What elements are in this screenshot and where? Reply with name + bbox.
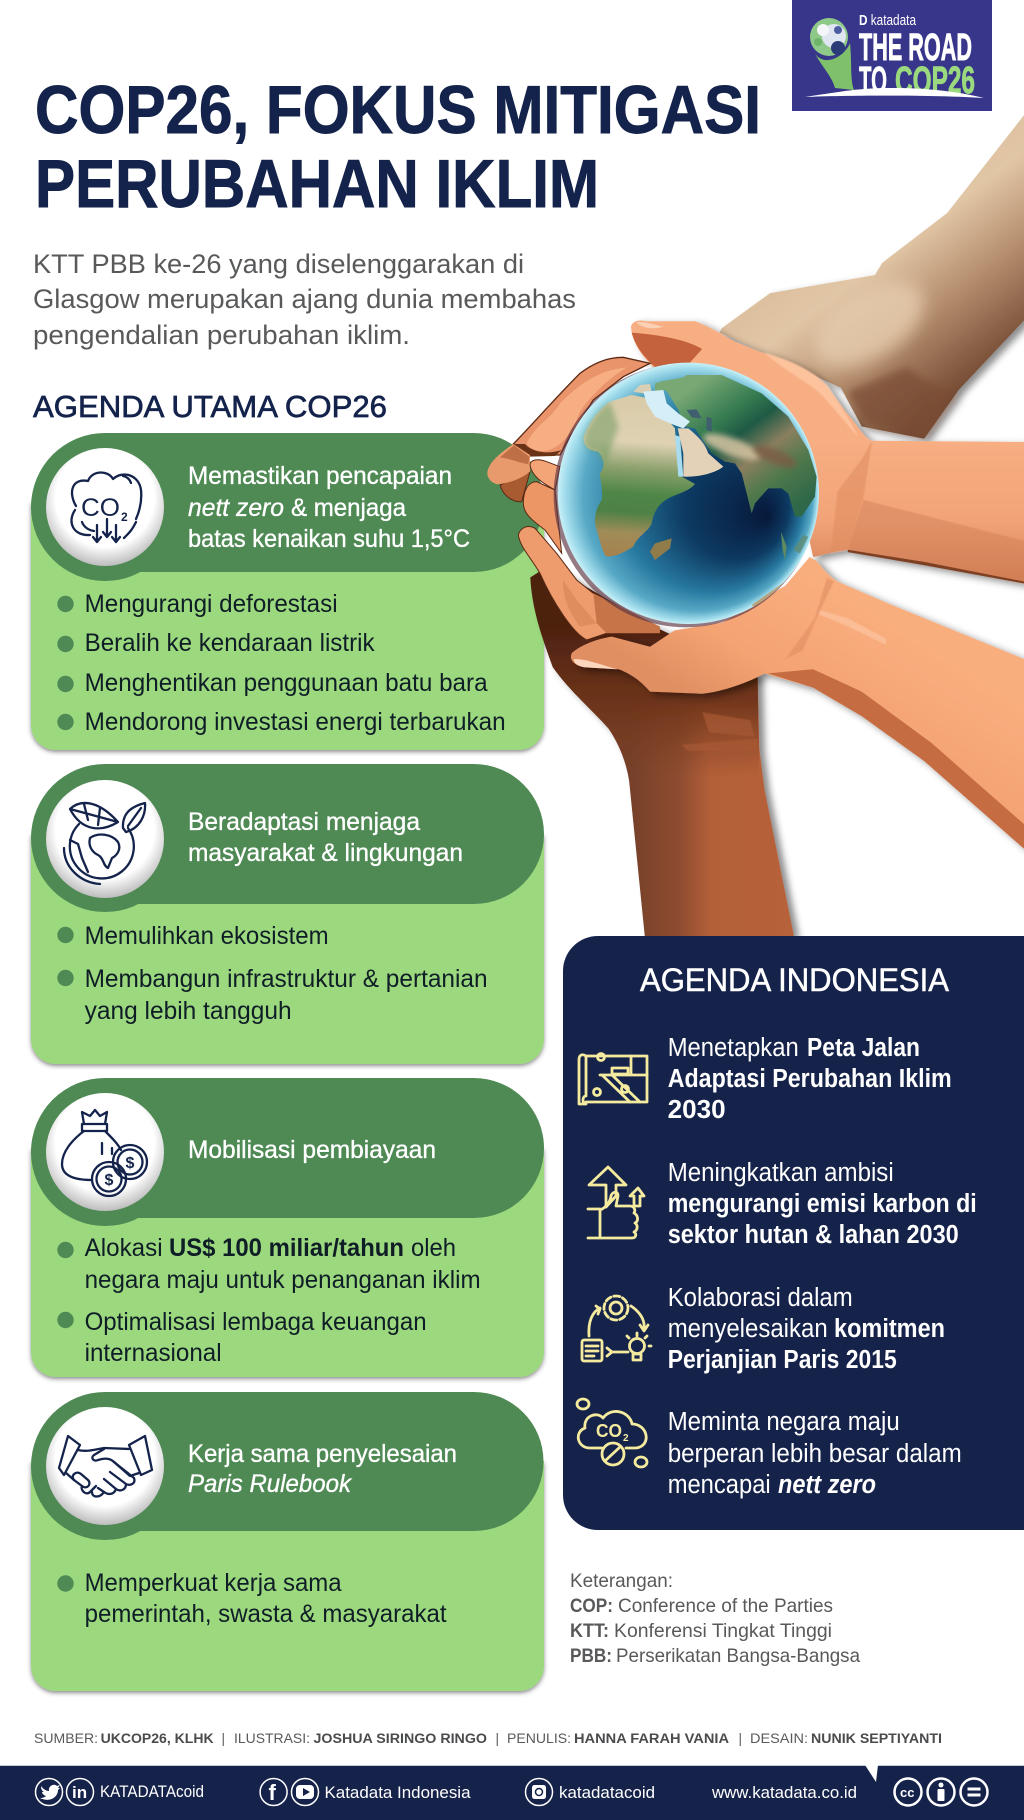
icon: youtube	[292, 1778, 318, 1806]
card 4 heading: Kerja sama penyelesaian	[188, 1440, 457, 1468]
globe	[554, 363, 819, 627]
source credits: |	[496, 1731, 499, 1746]
eurasia brown band	[751, 444, 798, 470]
finger tip	[487, 444, 530, 484]
card 2 body	[31, 834, 544, 1064]
card 1 heading: batas kenaikan suhu 1,5°C	[188, 525, 470, 553]
agenda item 2: mengurangi emisi karbon di	[668, 1190, 977, 1218]
footer notch	[865, 1765, 878, 1782]
illustration: hands holding globe	[487, 115, 1024, 936]
icon: facebook: f	[268, 1780, 276, 1805]
icon: earth and leaves	[64, 803, 145, 884]
sumatra	[781, 532, 787, 560]
card 4 heading	[188, 1440, 457, 1498]
card 2 bullets: yang lebih tangguh	[85, 997, 292, 1025]
card 4 body	[31, 1461, 544, 1691]
logo globe	[810, 18, 848, 56]
card 1 heading	[188, 462, 470, 553]
panel: card 3 finance	[31, 1078, 544, 1377]
intro text	[33, 249, 576, 350]
agenda item 3: komitmen	[834, 1315, 945, 1343]
notes: keterangan: Conference of the Parties	[618, 1595, 833, 1617]
source credits	[34, 1731, 942, 1746]
logo swoosh	[805, 88, 984, 98]
agenda item 4	[668, 1408, 962, 1499]
logo wordmark: TO	[859, 60, 887, 102]
source credits: SUMBER:	[34, 1731, 98, 1746]
lower palm	[518, 527, 660, 640]
borneo	[793, 535, 808, 553]
source credits: DESAIN:	[750, 1731, 808, 1746]
eurasia tan band	[700, 430, 761, 463]
source credits: UKCOP26, KLHK	[101, 1731, 214, 1746]
tan arm	[719, 115, 1024, 439]
card 1 bullets: Mendorong investasi energi terbarukan	[85, 708, 506, 736]
intro text: Glasgow merupakan ajang dunia membahas	[33, 284, 576, 314]
icon: creative commons: cc	[900, 1785, 914, 1800]
mediterranean	[643, 390, 690, 428]
card 2 bullets: Membangun infrastruktur & pertanian	[85, 965, 488, 993]
card 3 ring	[31, 1078, 179, 1226]
agenda item 2	[668, 1159, 977, 1249]
arabia	[678, 428, 723, 477]
card 1 bullets: Menghentikan penggunaan batu bara	[85, 669, 488, 697]
panel: agenda indonesia	[563, 936, 1024, 1530]
icon: CO2 cloud: 2	[121, 510, 128, 524]
continent: africa	[583, 395, 695, 557]
card 2 bullets	[57, 922, 488, 1025]
card 4 bullets	[57, 1569, 447, 1628]
icon: facebook	[260, 1778, 287, 1806]
card 2 heading: Beradaptasi menjaga	[188, 808, 420, 836]
agenda item 4: mencapai	[668, 1471, 771, 1499]
card 4 heading: Paris Rulebook	[188, 1470, 352, 1498]
africa west shading	[583, 402, 618, 467]
panel: card 4 paris rulebook	[31, 1392, 544, 1691]
agenda item 3: Perjanjian Paris 2015	[668, 1346, 897, 1374]
lower right arm and palm	[571, 557, 1024, 849]
card 2 ring	[31, 764, 179, 912]
card 2 header	[105, 764, 544, 904]
agenda item 3: menyelesaikan	[668, 1315, 828, 1343]
logo wordmark: D katadata	[859, 12, 917, 29]
agenda item 1: Menetapkan	[668, 1034, 799, 1062]
under finger	[500, 472, 530, 502]
footer handle: katadatacoid: katadatacoid	[559, 1783, 655, 1802]
source credits: NUNIK SEPTIYANTI	[811, 1731, 942, 1746]
card 3 body	[31, 1148, 544, 1377]
icon: map	[579, 1054, 647, 1104]
logo hand	[815, 43, 854, 90]
right arm with upper hand	[631, 320, 1024, 584]
title: PERUBAHAN IKLIM	[35, 146, 599, 222]
card 3 bullets	[57, 1234, 481, 1367]
inland seas	[687, 409, 712, 432]
footer handle: KATADATAcoid: KATADATAcoid	[100, 1782, 204, 1801]
logo wordmark	[859, 12, 975, 102]
agenda item 2: Meningkatkan ambisi	[668, 1159, 894, 1187]
card 2 heading: masyarakat & lingkungan	[188, 839, 463, 867]
card 4 ring	[31, 1392, 179, 1540]
card 3 heading: Mobilisasi pembiayaan	[188, 1136, 436, 1164]
left fingers	[487, 357, 660, 640]
globe ocean	[558, 363, 819, 624]
panel: card 2 adaptation	[31, 764, 544, 1064]
panel heading: AGENDA INDONESIA	[640, 962, 950, 998]
notes: keterangan: Konferensi Tingkat Tinggi	[614, 1620, 832, 1642]
notes: keterangan: Perserikatan Bangsa-Bangsa	[616, 1645, 860, 1667]
card 1 badge	[46, 448, 164, 566]
agenda item 4: nett zero	[778, 1471, 876, 1499]
footer bar	[0, 1765, 1024, 1820]
icon: linkedin: in	[72, 1783, 87, 1802]
agenda item 4: Meminta negara maju	[668, 1408, 900, 1436]
card 3 bullets: Alokasi	[85, 1234, 163, 1262]
card 1 body	[31, 502, 544, 750]
shadow wedge	[513, 444, 562, 457]
logo: The Road to COP26	[792, 0, 992, 111]
source credits: PENULIS:	[507, 1731, 571, 1746]
brown arm	[530, 565, 794, 936]
icon: money bag: $	[104, 1172, 114, 1189]
card 1 heading: nett zero	[188, 494, 284, 522]
madagascar	[650, 538, 672, 560]
icon: CO2 no cloud	[577, 1399, 647, 1467]
agenda item 1: Peta Jalan	[807, 1034, 920, 1062]
card 1 bullets: Mengurangi deforestasi	[85, 590, 338, 618]
card 4 bullets: Memperkuat kerja sama	[85, 1569, 342, 1597]
card 1 heading: Memastikan pencapaian	[188, 462, 452, 490]
intro text: KTT PBB ke-26 yang diselenggarakan di	[33, 249, 524, 279]
panel: card 1 net zero	[31, 433, 544, 750]
iberia	[633, 384, 652, 393]
notes: keterangan	[570, 1570, 860, 1667]
card 2 badge	[46, 780, 164, 898]
icon: CO2 no cloud: CO	[596, 1421, 622, 1441]
source credits: HANNA FARAH VANIA	[574, 1731, 729, 1746]
icon: twitter	[36, 1778, 62, 1806]
card 1 bullets: Beralih ke kendaraan listrik	[85, 629, 375, 657]
second finger	[530, 460, 560, 490]
agenda item 2: sektor hutan & lahan 2030	[668, 1221, 959, 1249]
card 3 bullets: internasional	[85, 1339, 222, 1367]
agenda item 1	[668, 1034, 952, 1124]
logo wordmark: COP26	[895, 60, 975, 102]
icon: creative commons	[894, 1778, 988, 1806]
title: COP26, FOKUS MITIGASI	[35, 72, 761, 148]
card 4 header	[105, 1392, 544, 1531]
icon: handshake	[59, 1436, 152, 1496]
icon: CO2 no cloud: 2	[623, 1433, 629, 1444]
heading: agenda utama: AGENDA UTAMA COP26	[33, 389, 387, 424]
card 4 badge	[46, 1407, 164, 1525]
footer website: www.katadata.co.id	[711, 1783, 857, 1802]
card 2 bullets: Memulihkan ekosistem	[85, 922, 329, 950]
agenda item 4: berperan lebih besar dalam	[668, 1440, 962, 1468]
globe rim	[554, 363, 818, 627]
icon: instagram	[526, 1778, 552, 1806]
icon: CO2 cloud: CO	[81, 494, 120, 522]
source credits: |	[222, 1731, 225, 1746]
card 3 bullets: US$ 100 miliar/tahun	[169, 1234, 404, 1262]
card 1 header	[105, 433, 544, 572]
notes: keterangan: COP:	[570, 1595, 613, 1617]
source credits: JOSHUA SIRINGO RINGO	[314, 1731, 487, 1746]
agenda item 1: 2030	[668, 1096, 726, 1124]
icon: money bag: $	[126, 1155, 134, 1172]
agenda item 3: Kolaborasi dalam	[668, 1284, 853, 1312]
card 2 heading	[188, 808, 463, 867]
card 1 bullets	[57, 590, 506, 736]
source credits: |	[738, 1731, 742, 1746]
card 3 bullets: Optimalisasi lembaga keuangan	[85, 1308, 427, 1336]
card 1 heading: & menjaga	[291, 494, 406, 522]
source credits: ILUSTRASI:	[234, 1731, 310, 1746]
agenda item 3	[668, 1284, 945, 1374]
icon: money bag	[62, 1110, 147, 1196]
card 3 bullets: oleh	[411, 1234, 456, 1262]
card 1 ring	[31, 433, 179, 581]
icon: collaboration cycle	[582, 1296, 651, 1361]
icon: arrows and thumbs up	[588, 1167, 644, 1238]
card 3 bullets: negara maju untuk penanganan iklim	[85, 1266, 481, 1294]
notes: keterangan: Keterangan:	[570, 1570, 673, 1592]
card 3 badge	[46, 1093, 164, 1211]
notes: keterangan: PBB:	[570, 1645, 612, 1667]
antarctica	[752, 582, 785, 607]
footer handle: Katadata Indonesia: Katadata Indonesia	[324, 1783, 471, 1802]
hand highlight	[527, 367, 627, 451]
card 4 bullets: pemerintah, swasta & masyarakat	[85, 1600, 447, 1628]
eurasia	[655, 375, 817, 517]
third finger	[523, 482, 562, 553]
intro text: pengendalian perubahan iklim.	[33, 320, 410, 350]
agenda item 1: Adaptasi Perubahan Iklim	[668, 1065, 952, 1093]
back of hand	[513, 357, 650, 455]
red sea	[675, 435, 683, 477]
notes: keterangan: KTT:	[570, 1620, 609, 1642]
card 3 header	[105, 1078, 544, 1218]
title	[35, 72, 761, 222]
icon: linkedin	[66, 1778, 94, 1806]
icon: CO2 cloud	[71, 472, 141, 542]
